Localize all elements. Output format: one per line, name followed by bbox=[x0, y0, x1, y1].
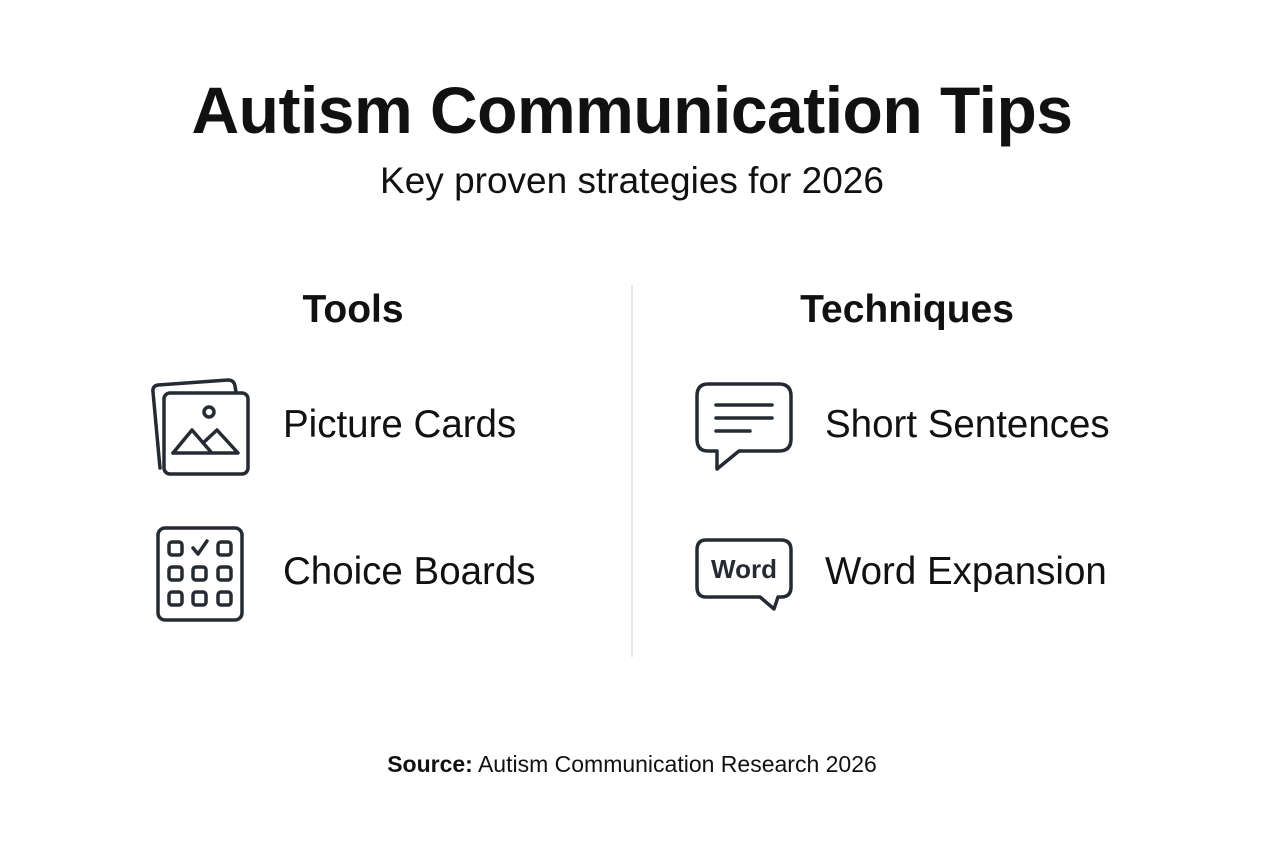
icon: word bubble bbox=[695, 538, 793, 611]
icon: word bubble: Word bbox=[711, 554, 777, 584]
label: Picture Cards: Picture Cards bbox=[283, 403, 516, 446]
subtitle: Key proven strategies for 2026 bbox=[380, 160, 884, 201]
label: Choice Boards: Choice Boards bbox=[283, 550, 536, 593]
icon: picture cards bbox=[151, 378, 250, 476]
source: Source: Autism Communication Research 2026 bbox=[387, 751, 877, 777]
label: Word Expansion: Word Expansion bbox=[825, 550, 1107, 593]
heading: Techniques: Techniques bbox=[800, 288, 1014, 331]
title: Autism Communication Tips bbox=[191, 73, 1072, 147]
icon: speech bubble bbox=[695, 382, 793, 471]
heading: Tools: Tools bbox=[302, 288, 404, 331]
icon: choice board bbox=[156, 526, 244, 622]
label: Short Sentences: Short Sentences bbox=[825, 403, 1110, 446]
